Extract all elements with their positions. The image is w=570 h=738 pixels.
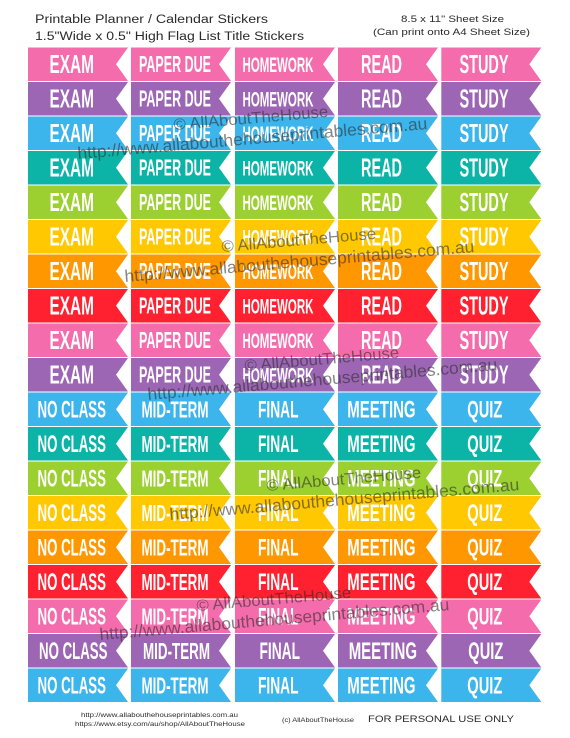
flag: EXAM blue	[28, 116, 128, 150]
flag: PAPER DUE teal	[131, 151, 231, 184]
flag: MEETING purple	[338, 634, 438, 668]
column: FINAL flags	[235, 392, 335, 702]
flag: STUDY purple 2: STUDY	[459, 360, 508, 390]
flag: QUIZ purple	[441, 634, 541, 668]
flag: PAPER DUE pink: PAPER DUE	[139, 51, 211, 77]
watermark 1: © AllAboutTheHouse	[173, 104, 329, 134]
flag: READ purple 2	[338, 358, 438, 392]
flag: READ red	[338, 289, 438, 322]
flag: READ orange: READ	[361, 256, 402, 286]
column: READ flags	[338, 48, 438, 392]
flag: HOMEWORK yellow: HOMEWORK	[242, 226, 314, 249]
flag: MEETING pink: MEETING	[347, 604, 416, 630]
flag: FINAL green	[235, 462, 335, 495]
flag: HOMEWORK green: HOMEWORK	[242, 192, 314, 215]
flag: MEETING blue	[338, 392, 438, 426]
flag: PAPER DUE red: PAPER DUE	[139, 292, 211, 318]
flag: QUIZ green: QUIZ	[467, 466, 502, 492]
flag: MEETING teal	[338, 427, 438, 460]
flag: EXAM pink 2: EXAM	[50, 325, 94, 355]
flag: MID-TERM teal: MID-TERM	[142, 431, 208, 457]
flag: MID-TERM blue	[131, 392, 231, 426]
flag: PAPER DUE pink	[131, 48, 231, 81]
flag: READ green: READ	[361, 187, 402, 217]
flag: NO CLASS pink	[28, 600, 128, 633]
flag: QUIZ teal	[441, 427, 541, 460]
footer website links: https://www.etsy.com/au/shop/AllAboutTheHouse	[75, 721, 245, 728]
flag: PAPER DUE orange	[131, 254, 231, 288]
watermark 3: © AllAboutTheHouse	[244, 345, 400, 375]
flag: QUIZ yellow	[441, 496, 541, 530]
flag: QUIZ pink: QUIZ	[467, 604, 502, 630]
flag: MEETING blue: MEETING	[347, 396, 416, 424]
flag: STUDY teal: STUDY	[459, 152, 508, 182]
flag: FINAL blue	[235, 392, 335, 426]
flag: STUDY teal	[441, 151, 541, 184]
column: HOMEWORK flags	[235, 48, 335, 392]
flag: STUDY orange: STUDY	[459, 256, 508, 286]
flag: READ purple	[338, 82, 438, 116]
flag: FINAL pink	[235, 600, 335, 633]
flag: STUDY red: STUDY	[459, 290, 508, 320]
flag: EXAM teal: EXAM	[50, 152, 94, 182]
flag: FINAL purple: FINAL	[260, 638, 300, 665]
flag: MID-TERM red: MID-TERM	[142, 569, 208, 595]
flag: QUIZ red	[441, 565, 541, 598]
flag: PAPER DUE purple 2	[131, 358, 231, 392]
flag: EXAM red: EXAM	[50, 290, 94, 320]
flag: STUDY pink: STUDY	[459, 49, 508, 79]
flag: PAPER DUE green	[131, 186, 231, 219]
flag: QUIZ orange: QUIZ	[467, 534, 502, 562]
flag: PAPER DUE orange: PAPER DUE	[139, 258, 211, 284]
flag: READ red: READ	[361, 290, 402, 320]
flag: QUIZ green	[441, 462, 541, 495]
title: 1.5"Wide x 0.5" High Flag List Title Stickers	[35, 31, 304, 43]
flag: MID-TERM yellow: MID-TERM	[142, 500, 208, 526]
flag: STUDY pink	[441, 48, 541, 81]
flag: MEETING blue 2	[338, 668, 438, 702]
flag: FINAL blue 2: FINAL	[258, 672, 298, 700]
footer usage note: FOR PERSONAL USE ONLY	[368, 714, 515, 725]
flag: NO CLASS teal: NO CLASS	[38, 431, 106, 458]
flag: READ teal: READ	[361, 152, 402, 182]
flag: STUDY yellow	[441, 220, 541, 254]
flag: QUIZ blue 2: QUIZ	[467, 672, 502, 700]
flag: MEETING blue 2: MEETING	[347, 672, 416, 700]
flag: PAPER DUE purple: PAPER DUE	[139, 86, 211, 112]
flag: HOMEWORK blue	[235, 116, 335, 150]
column: MEETING flags	[338, 392, 438, 702]
flag: HOMEWORK green	[235, 186, 335, 219]
flag: EXAM pink	[28, 48, 128, 81]
flag: MEETING green	[338, 462, 438, 495]
title: Printable Planner / Calendar Stickers	[35, 14, 268, 26]
flag: HOMEWORK yellow	[235, 220, 335, 254]
flag: MEETING red: MEETING	[347, 569, 416, 596]
flag: MEETING orange	[338, 530, 438, 564]
flag: EXAM green: EXAM	[50, 187, 94, 217]
flag: FINAL teal	[235, 427, 335, 460]
flag: STUDY pink 2: STUDY	[459, 325, 508, 355]
flag: HOMEWORK purple: HOMEWORK	[242, 88, 314, 111]
flag: NO CLASS blue	[28, 392, 128, 426]
flag: FINAL yellow	[235, 496, 335, 530]
flag: EXAM pink 2	[28, 324, 128, 357]
flag: MID-TERM blue 2	[131, 668, 231, 702]
flag: FINAL blue: FINAL	[258, 396, 298, 424]
flag: MID-TERM purple: MID-TERM	[143, 638, 210, 664]
flag: EXAM teal	[28, 151, 128, 184]
flag: NO CLASS green: NO CLASS	[38, 466, 106, 492]
flag: PAPER DUE pink 2	[131, 324, 231, 357]
flag: MEETING teal: MEETING	[347, 431, 416, 458]
flag: MID-TERM pink: MID-TERM	[142, 603, 208, 629]
flag: NO CLASS purple	[28, 634, 128, 668]
flag: QUIZ blue	[441, 392, 541, 426]
flag: MEETING orange: MEETING	[347, 534, 416, 562]
sheet size note: (Can print onto A4 Sheet Size)	[373, 27, 530, 38]
flag: NO CLASS pink: NO CLASS	[38, 604, 106, 630]
watermark 4: © AllAboutTheHouse	[266, 465, 422, 495]
flag: MEETING red	[338, 565, 438, 598]
column: NO CLASS flags	[28, 392, 128, 702]
flag: STUDY yellow: STUDY	[459, 222, 508, 252]
flag: NO CLASS yellow	[28, 496, 128, 530]
flag: READ green	[338, 186, 438, 219]
flag: HOMEWORK orange: HOMEWORK	[242, 261, 314, 284]
flag: FINAL red	[235, 565, 335, 598]
flag: EXAM purple 2	[28, 358, 128, 392]
flag: EXAM purple	[28, 82, 128, 116]
flag: PAPER DUE yellow	[131, 220, 231, 254]
flag: MID-TERM blue: MID-TERM	[142, 396, 208, 422]
flag: FINAL orange: FINAL	[258, 534, 298, 562]
flag: STUDY purple	[441, 82, 541, 116]
flag: MID-TERM blue 2: MID-TERM	[142, 672, 208, 698]
flag: STUDY blue	[441, 116, 541, 150]
flag: READ purple: READ	[361, 84, 402, 114]
flag: EXAM red	[28, 289, 128, 322]
watermark 2: © AllAboutTheHouse	[221, 226, 377, 256]
flag: EXAM green	[28, 186, 128, 219]
flag: HOMEWORK pink: HOMEWORK	[242, 54, 314, 77]
watermark 4: http://www.allabouthehouseprintables.com.au	[169, 475, 520, 524]
flag: PAPER DUE pink 2: PAPER DUE	[139, 327, 211, 353]
footer website links: http://www.allabouthehouseprintables.com.au	[81, 712, 238, 719]
flag: QUIZ teal: QUIZ	[467, 431, 502, 458]
flag: MEETING pink	[338, 600, 438, 633]
column: PAPER DUE flags	[131, 48, 231, 392]
flag: EXAM blue: EXAM	[50, 118, 94, 148]
flag: QUIZ purple: QUIZ	[468, 638, 503, 665]
flag: FINAL teal: FINAL	[258, 431, 298, 458]
flag: PAPER DUE red	[131, 289, 231, 322]
flag: READ yellow	[338, 220, 438, 254]
flag: MID-TERM teal	[131, 427, 231, 460]
flag: EXAM purple 2: EXAM	[50, 360, 94, 390]
flag: READ pink: READ	[361, 49, 402, 79]
flag: QUIZ blue: QUIZ	[467, 396, 502, 424]
flag: FINAL red: FINAL	[258, 569, 298, 596]
footer website links	[75, 712, 245, 728]
flag: HOMEWORK purple 2	[235, 358, 335, 392]
flag: MEETING purple: MEETING	[349, 638, 417, 665]
flag: QUIZ orange	[441, 530, 541, 564]
flag: NO CLASS red	[28, 565, 128, 598]
flag: READ pink 2: READ	[361, 325, 402, 355]
flag: HOMEWORK purple 2: HOMEWORK	[242, 364, 314, 387]
flag: STUDY blue: STUDY	[459, 118, 508, 148]
flag: EXAM orange: EXAM	[50, 256, 94, 286]
flag: MEETING yellow	[338, 496, 438, 530]
flag: HOMEWORK pink	[235, 48, 335, 81]
flag: PAPER DUE purple 2: PAPER DUE	[139, 362, 211, 388]
title	[35, 14, 304, 43]
flag: EXAM orange	[28, 254, 128, 288]
flag: STUDY purple 2	[441, 358, 541, 392]
column: STUDY flags	[441, 48, 541, 392]
flag: STUDY green	[441, 186, 541, 219]
flag: HOMEWORK red	[235, 289, 335, 322]
column: EXAM flags	[28, 48, 128, 392]
flag: MID-TERM green	[131, 462, 231, 495]
flag: HOMEWORK red: HOMEWORK	[242, 295, 314, 318]
flag: READ blue	[338, 116, 438, 150]
flag: HOMEWORK pink 2: HOMEWORK	[242, 330, 314, 353]
flag: HOMEWORK pink 2	[235, 324, 335, 357]
flag: HOMEWORK purple	[235, 82, 335, 116]
flag: STUDY pink 2	[441, 324, 541, 357]
flag: FINAL blue 2	[235, 668, 335, 702]
watermark 5: © AllAboutTheHouse	[196, 585, 352, 615]
sheet size note: 8.5 x 11" Sheet Size	[401, 14, 504, 25]
flag: HOMEWORK teal: HOMEWORK	[242, 157, 314, 180]
flag: STUDY green: STUDY	[459, 187, 508, 217]
flag: PAPER DUE blue	[131, 116, 231, 150]
flag: QUIZ blue 2	[441, 668, 541, 702]
flag: HOMEWORK teal	[235, 151, 335, 184]
flag: READ pink	[338, 48, 438, 81]
flag: PAPER DUE purple	[131, 82, 231, 116]
flag: HOMEWORK orange	[235, 254, 335, 288]
flag: MEETING yellow: MEETING	[347, 500, 416, 527]
flag: STUDY purple: STUDY	[459, 84, 508, 114]
flag: PAPER DUE green: PAPER DUE	[139, 189, 211, 215]
flag: MID-TERM yellow	[131, 496, 231, 530]
flag: READ blue: READ	[361, 118, 402, 148]
watermark 2: http://www.allabouthehouseprintables.com.au	[124, 237, 475, 286]
flag: FINAL yellow: FINAL	[258, 500, 298, 527]
flag: NO CLASS blue 2	[28, 668, 128, 702]
flag: READ purple 2: READ	[361, 360, 402, 390]
flag: MID-TERM red	[131, 565, 231, 598]
column: QUIZ flags	[441, 392, 541, 702]
flag: MID-TERM orange: MID-TERM	[142, 534, 208, 560]
flag: FINAL green: FINAL	[258, 466, 298, 492]
column: MID-TERM flags	[131, 392, 231, 702]
flag: HOMEWORK blue: HOMEWORK	[242, 123, 314, 146]
flag: READ orange	[338, 254, 438, 288]
watermark 3: http://www.allabouthehouseprintables.com.au	[147, 355, 498, 404]
flag: NO CLASS purple: NO CLASS	[39, 638, 108, 665]
flag: EXAM yellow	[28, 220, 128, 254]
watermark 1: http://www.allabouthehouseprintables.com.au	[77, 114, 428, 163]
flag: MID-TERM purple	[131, 634, 231, 668]
flag: EXAM yellow: EXAM	[50, 222, 94, 252]
watermark 5: http://www.allabouthehouseprintables.com.au	[99, 595, 450, 644]
flag: NO CLASS yellow: NO CLASS	[38, 500, 106, 527]
flag: NO CLASS red: NO CLASS	[38, 569, 106, 596]
flag: MID-TERM green: MID-TERM	[142, 465, 208, 491]
flag: EXAM pink: EXAM	[50, 49, 94, 79]
sheet size note	[373, 14, 530, 38]
flag: STUDY orange	[441, 254, 541, 288]
flag: MEETING green: MEETING	[347, 466, 416, 492]
flag: PAPER DUE blue: PAPER DUE	[139, 120, 211, 146]
flag: FINAL pink: FINAL	[258, 604, 298, 630]
flag: QUIZ red: QUIZ	[467, 569, 502, 596]
footer copyright: (c) AllAboutTheHouse	[282, 717, 354, 724]
flag: NO CLASS blue 2: NO CLASS	[38, 672, 106, 700]
flag: EXAM purple: EXAM	[50, 84, 94, 114]
flag: PAPER DUE teal: PAPER DUE	[139, 154, 211, 180]
flag: FINAL purple	[235, 634, 335, 668]
flag: STUDY red	[441, 289, 541, 322]
flag: READ teal	[338, 151, 438, 184]
flag: QUIZ pink	[441, 600, 541, 633]
flag: NO CLASS green	[28, 462, 128, 495]
flag: MID-TERM pink	[131, 600, 231, 633]
flag: READ yellow: READ	[361, 222, 402, 252]
flag: FINAL orange	[235, 530, 335, 564]
flag: QUIZ yellow: QUIZ	[467, 500, 502, 527]
flag: READ pink 2	[338, 324, 438, 357]
flag: MID-TERM orange	[131, 530, 231, 564]
flag: NO CLASS orange	[28, 530, 128, 564]
flag: NO CLASS teal	[28, 427, 128, 460]
flag: NO CLASS orange: NO CLASS	[38, 534, 106, 562]
flag: NO CLASS blue: NO CLASS	[38, 396, 106, 424]
flag: PAPER DUE yellow: PAPER DUE	[139, 224, 211, 250]
